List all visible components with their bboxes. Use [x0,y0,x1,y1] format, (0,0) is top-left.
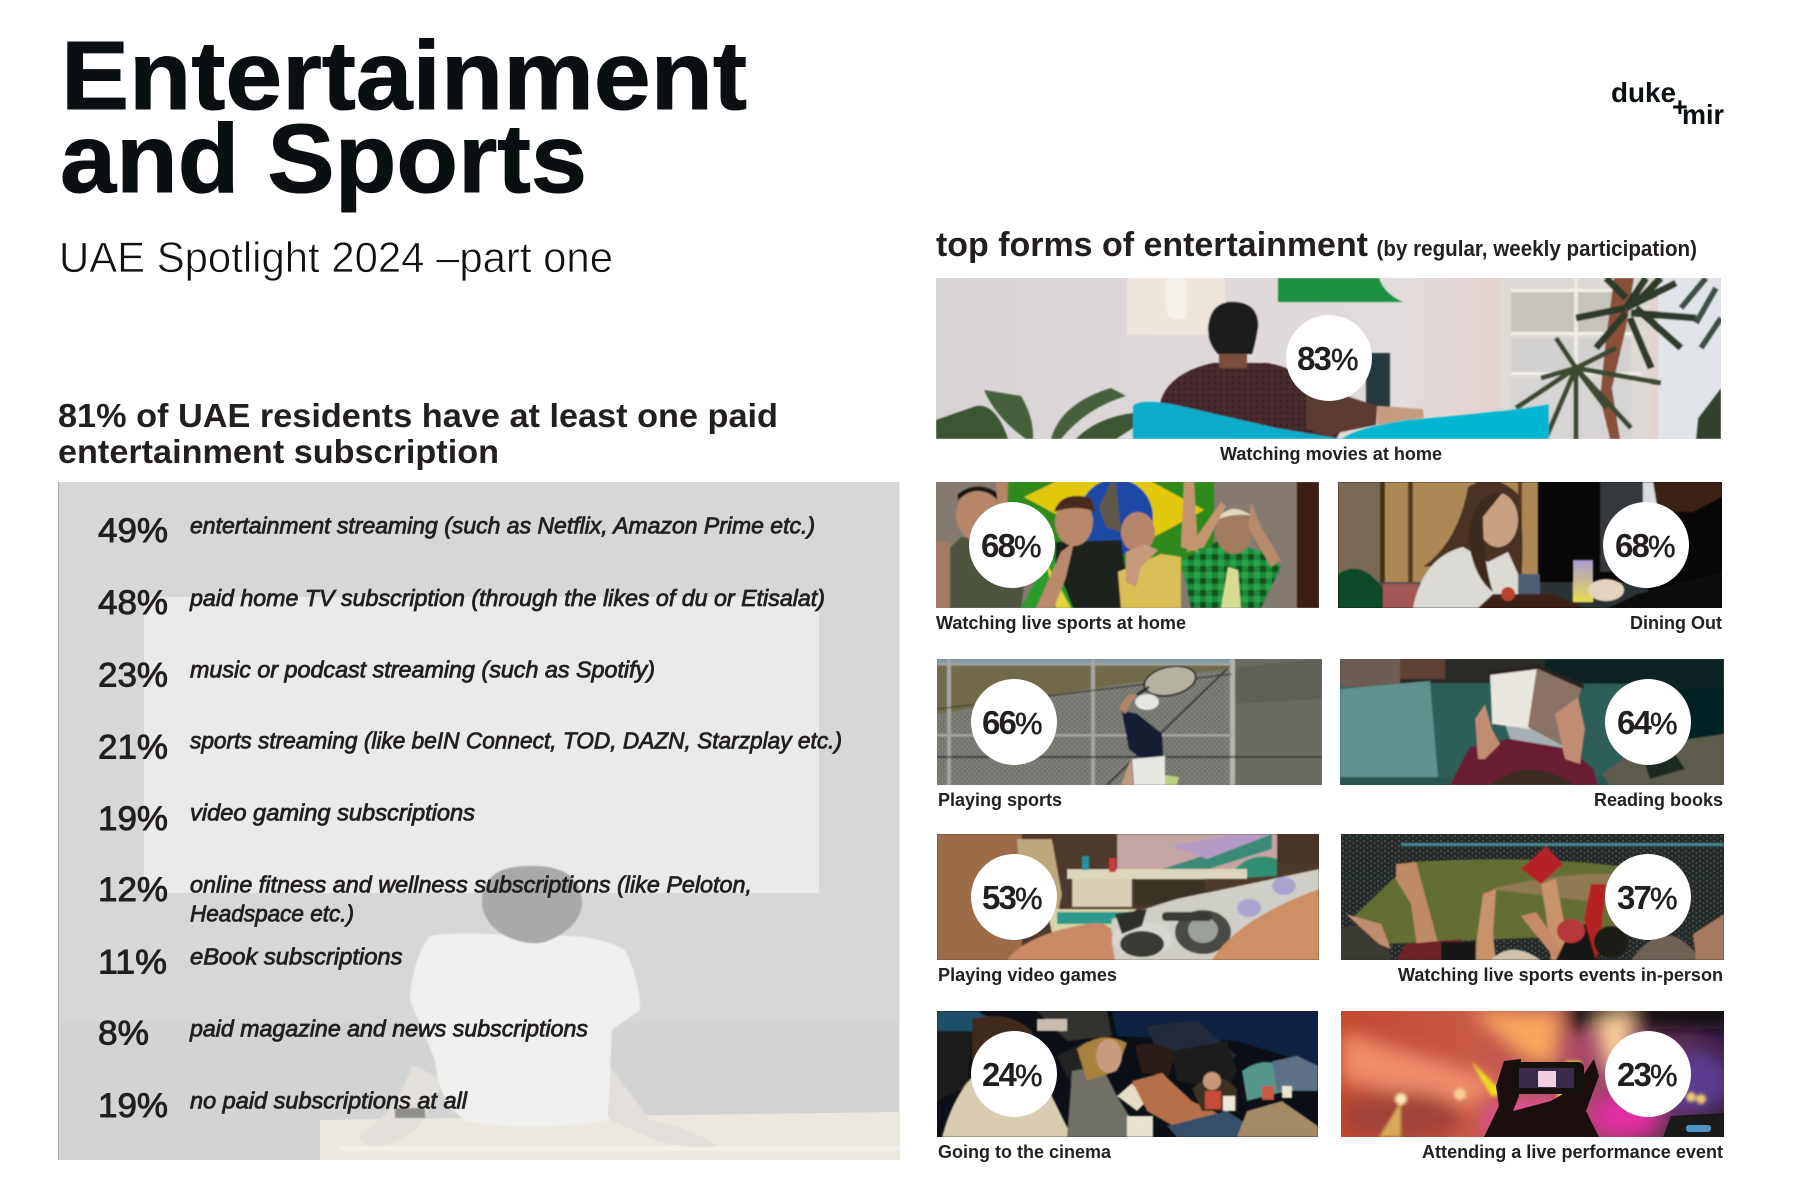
badge: 64%: % [1650,706,1678,741]
card: dining out [1338,480,1722,633]
badge: 83%: % [1331,342,1359,377]
badge: 24%: 24 [982,1056,1015,1093]
caption: Watching live sports events in-person [1398,964,1723,985]
logo: duke+mir: + [1672,92,1688,122]
list row: 48%: 48% [98,584,168,622]
title: and Sports [60,104,587,213]
badge: 24%: % [1015,1058,1043,1093]
list row: 11%: eBook subscriptions [190,943,403,969]
subscription heading: 81% of UAE residents have at least one paid [58,398,778,435]
list row: 19% video gaming: 19% [98,800,168,838]
list row: 49% [98,512,815,550]
photo: hands on game controller [937,834,1319,960]
badge: 68%: % [1648,529,1676,564]
badge: 23%: % [1650,1058,1678,1093]
badge: 24% [971,1031,1057,1117]
list row: 11% [98,943,403,982]
badge: 53%: % [1015,881,1043,916]
badge: 23%: 23 [1617,1056,1650,1093]
list row: 8% [98,1015,588,1053]
logo: duke+mir: mir [1682,99,1724,130]
caption: Playing sports [938,789,1062,810]
badge: 23% [1605,1031,1691,1117]
caption: Dining Out [1630,612,1722,633]
card: watching live sports in person [1341,834,1724,985]
photo: fans with Brazilian flag [936,482,1319,608]
entertainment heading: top forms of entertainment [936,226,1368,264]
caption: Watching movies at home [1220,443,1442,464]
list row: 48%: paid home TV subscription (through the likes of du or Etisalat) [189,585,825,611]
card: going to the cinema [937,1011,1318,1162]
list row: 21%: 21% [98,728,168,766]
badge: 68% [1603,502,1689,588]
photo: tennis player at fence [937,659,1322,785]
logo: duke+mir [1611,77,1724,130]
photo: baseball stadium crowd [1341,834,1724,960]
subscription heading [58,398,778,471]
photo: woman at restaurant table [1338,482,1722,608]
title [60,21,747,213]
list row: 12%: Headspace etc.) [190,901,354,927]
list row: 21%: sports streaming (like beIN Connect, TOD, DAZN, Starzplay etc.) [190,728,842,754]
list row: 12%: 12% [98,871,168,909]
caption: Going to the cinema [938,1141,1112,1162]
caption: Watching live sports at home [936,612,1186,633]
photo: man on blue sofa [936,278,1721,439]
badge: 53% [971,854,1057,940]
list row: 19% none: no paid subscriptions at all [190,1088,468,1114]
badge: 66%: % [1015,706,1043,741]
entertainment heading: (by regular, weekly participation) [1376,236,1697,261]
badge: 66% [971,679,1057,765]
badge: 66%: 66 [982,704,1015,741]
list row: 49%: entertainment streaming (such as Netflix, Amazon Prime etc.) [190,513,815,539]
badge: 68% [969,502,1055,588]
badge: 83% [1286,315,1372,401]
list row: 21% [98,728,842,766]
subtitle: UAE Spotlight 2024 –part one [59,234,613,282]
panel background photo: man facing a screen [58,482,900,1160]
list row: 49%: 49% [98,512,168,550]
list row: 23% [98,656,655,694]
list row: 19% video gaming: video gaming subscriptions [190,800,476,826]
card: watching movies at home [936,278,1721,464]
card: playing sports [937,659,1322,810]
card: attending a live performance [1341,1001,1736,1162]
panel: paid subscriptions list [58,482,900,1160]
entertainment heading [936,226,1697,264]
list row: 12%: online fitness and wellness subscriptions (like Peloton, [190,871,752,897]
subscription heading: entertainment subscription [58,434,499,471]
caption: Attending a live performance event [1422,1141,1723,1162]
list row: 19% video gaming [98,800,476,838]
badge: 68%: % [1014,529,1042,564]
list row: 8%: paid magazine and news subscriptions [189,1016,588,1042]
list row: 11%: 11% [98,944,167,982]
badge: 53%: 53 [982,879,1015,916]
badge: 37%: % [1650,881,1678,916]
list row: 23%: music or podcast streaming (such as Spotify) [190,656,655,682]
badge: 37%: 37 [1617,879,1650,916]
list row: 19% none: 19% [98,1087,168,1125]
badge: 37% [1605,854,1691,940]
list row: 12% [98,871,752,927]
badge: 68%: 68 [981,527,1014,564]
list row: 48% [98,584,825,622]
card: playing video games [937,834,1319,985]
card: watching live sports at home [936,457,1319,633]
caption: Reading books [1594,789,1723,810]
list row: 23%: 23% [98,656,168,694]
logo: duke+mir: duke [1611,77,1676,108]
badge: 83%: 83 [1297,340,1330,377]
caption: Playing video games [938,964,1117,985]
title: Entertainment [61,21,747,130]
badge: 64% [1605,679,1691,765]
photo: person reading on teal sofa [1340,659,1724,785]
photo: phone filming a concert [1341,1011,1724,1137]
list row: 19% none [98,1087,468,1125]
badge: 64%: 64 [1617,704,1650,741]
list row: 8%: 8% [98,1015,149,1053]
badge: 68%: 68 [1615,527,1648,564]
photo: audience in cinema seats [937,1011,1318,1137]
card: reading books [1340,659,1724,810]
